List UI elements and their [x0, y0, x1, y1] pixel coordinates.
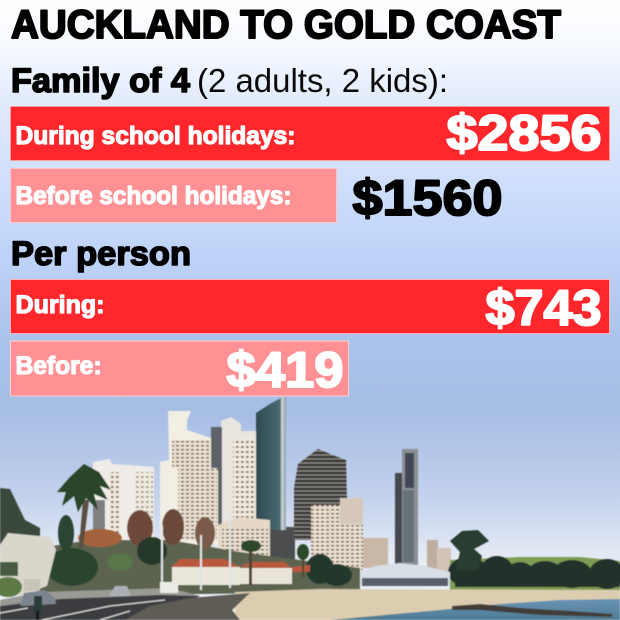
bar: during, per person: During: — [16, 291, 104, 319]
heading: family of 4: Family of 4 — [11, 62, 190, 100]
bar: before school holidays, family — [10, 168, 336, 222]
building: mid-rise cream front — [218, 517, 270, 560]
value: before school holidays, family: $1560 — [352, 170, 502, 226]
hill — [450, 557, 620, 590]
building: dark high-rise — [294, 449, 347, 540]
building: cream stepped block — [311, 498, 363, 570]
bar: during, per person: $743 — [486, 280, 602, 336]
terminal building on beach — [360, 563, 450, 586]
cars and cyclist — [20, 582, 178, 620]
heading: family of 4 — [11, 62, 448, 100]
building: white apartment block — [93, 459, 154, 540]
tree: tall pine — [450, 530, 489, 570]
bar: during school holidays, family — [10, 105, 610, 161]
bar: before, per person — [10, 341, 348, 398]
autumn and green trees — [46, 509, 215, 586]
white house on left — [0, 533, 56, 596]
bar: before, per person: $419 — [226, 342, 344, 398]
bar: before, per person: Before: — [16, 352, 102, 380]
heading: per person: Per person — [11, 235, 191, 273]
bar: during school holidays, family: $2856 — [446, 105, 602, 161]
rock embankment — [125, 593, 250, 620]
road markings — [0, 600, 165, 620]
left hillside trees — [0, 488, 40, 545]
background greenery band behind houses — [40, 540, 360, 596]
building: grey and white tower — [211, 417, 256, 525]
building: tall cream tower — [160, 411, 218, 545]
bar: during school holidays, family: During school holidays: — [16, 122, 296, 150]
rocks in the water — [452, 604, 612, 617]
tree: mid beach tree — [306, 554, 352, 586]
buildings: small beige blocks behind beach — [270, 527, 451, 572]
shrub by house — [0, 577, 22, 597]
heading: family of 4: (2 adults, 2 kids): — [197, 62, 448, 99]
palm tree — [57, 464, 111, 548]
pavement — [0, 588, 200, 606]
sand beach — [235, 589, 620, 620]
road — [0, 595, 200, 620]
building: thin dark tower — [395, 449, 418, 565]
low houses with red roofs — [171, 559, 310, 585]
trees: right tree line — [448, 556, 620, 589]
building: glass tower — [256, 397, 286, 530]
lamp posts — [161, 510, 231, 590]
small palms — [241, 540, 309, 585]
photo: Auckland waterfront skyline — [0, 397, 620, 620]
bar: before school holidays, family: Before school holidays: — [16, 182, 292, 210]
title: AUCKLAND TO GOLD COAST — [11, 3, 561, 47]
sea water — [330, 599, 620, 620]
bar: during, per person — [10, 280, 610, 336]
